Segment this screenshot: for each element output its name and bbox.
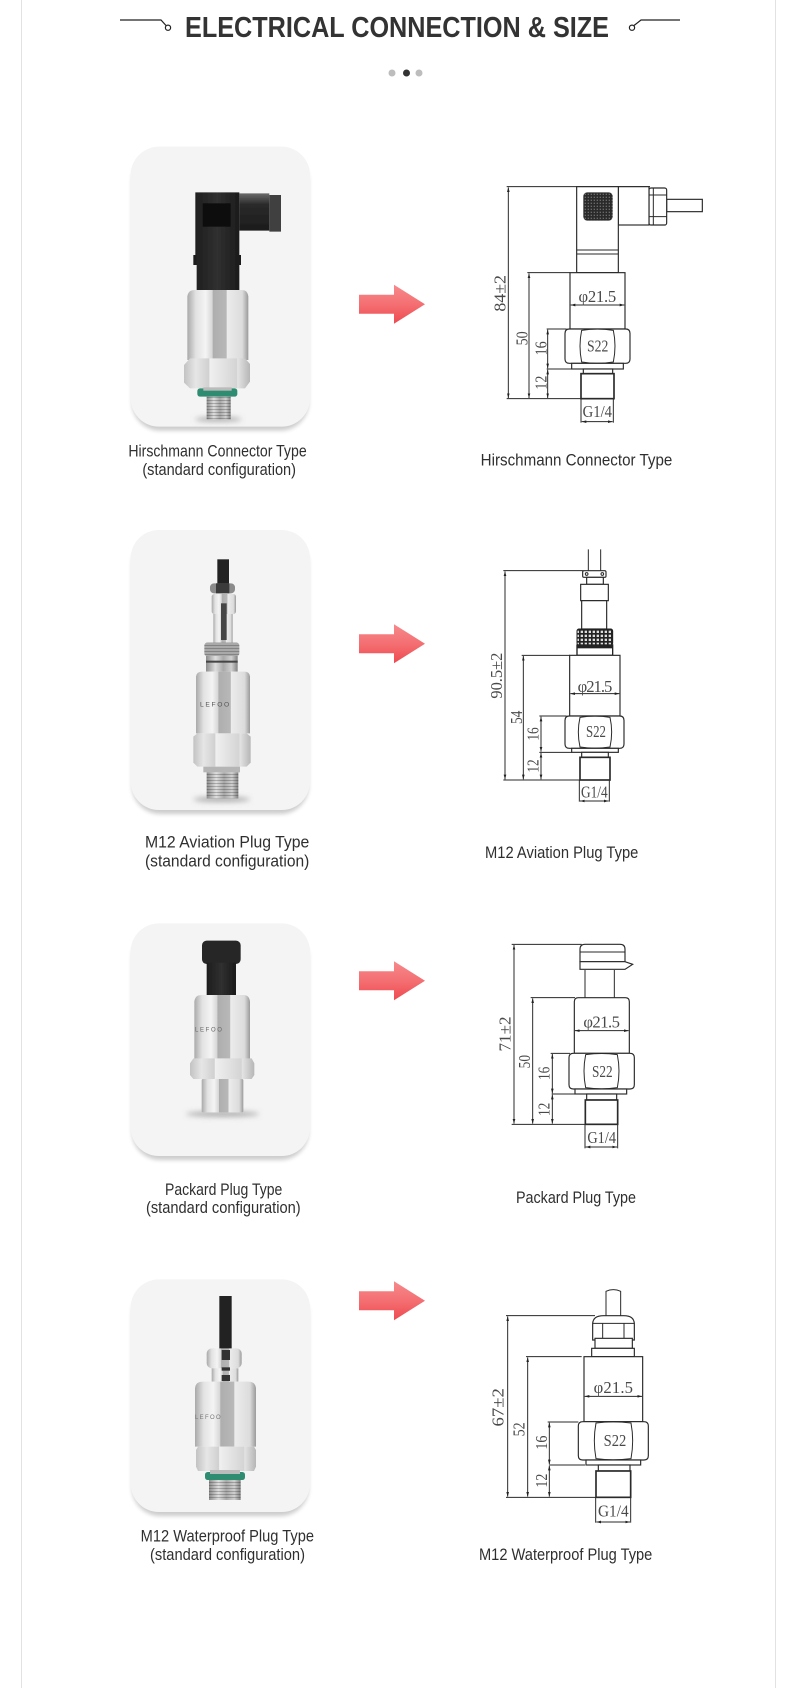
technical drawing: M12 waterproof: S22 <box>604 1431 626 1450</box>
technical drawing: M12 aviation <box>487 549 624 802</box>
panel: M12 waterproof plug type <box>131 1279 652 1564</box>
caption: M12 aviation drawing: M12 Aviation Plug Type <box>485 843 638 862</box>
caption: M12 aviation product <box>145 832 309 870</box>
technical drawing: M12 aviation: S22 <box>586 722 606 741</box>
arrow <box>359 1281 425 1320</box>
title ornament right <box>629 20 680 30</box>
technical drawing: M12 aviation: G1/4 <box>581 783 608 802</box>
technical drawing: Hirschmann: 84±2 <box>490 275 509 312</box>
technical drawing: M12 waterproof: 52 <box>510 1422 529 1436</box>
caption: Hirschmann product: Hirschmann Connector Type <box>128 442 307 461</box>
caption: Packard drawing: Packard Plug Type <box>516 1188 636 1207</box>
technical drawing: Hirschmann: 16 <box>531 341 550 355</box>
technical drawing: M12 aviation: 12 <box>524 759 543 773</box>
technical drawing: Packard: φ21.5 <box>583 1013 620 1032</box>
technical drawing: M12 waterproof: 16 <box>532 1436 551 1450</box>
title ornament left <box>120 20 171 30</box>
technical drawing: Packard: 12 <box>534 1103 553 1116</box>
pagination dots <box>388 70 422 76</box>
technical drawing: M12 waterproof <box>489 1290 648 1523</box>
product card: M12 aviation <box>131 530 310 814</box>
caption: M12 aviation product: (standard configuration) <box>145 851 309 870</box>
product card: M12 waterproof: LEFOO <box>195 1415 222 1421</box>
technical drawing: M12 aviation: 16 <box>524 727 543 741</box>
caption: M12 waterproof product: (standard configuration) <box>150 1545 305 1564</box>
product card: M12 waterproof <box>131 1279 310 1516</box>
caption: Packard product <box>146 1180 301 1217</box>
technical drawing: M12 waterproof: 12 <box>532 1474 551 1488</box>
technical drawing: M12 aviation: φ21.5 <box>578 677 612 696</box>
technical drawing: M12 waterproof: 67±2 <box>489 1388 508 1426</box>
technical drawing: Packard <box>495 944 634 1148</box>
caption: Hirschmann product <box>128 442 307 479</box>
technical drawing: M12 aviation: 54 <box>507 710 526 724</box>
technical drawing: Packard: G1/4 <box>587 1128 617 1147</box>
caption: M12 waterproof product <box>141 1527 314 1564</box>
heading text: ELECTRICAL CONNECTION & SIZE <box>185 12 609 44</box>
caption: M12 waterproof product: M12 Waterproof Plug Type <box>141 1527 314 1546</box>
product card: Packard <box>131 923 310 1160</box>
panel: M12 aviation plug type <box>131 530 638 870</box>
caption: Hirschmann drawing: Hirschmann Connector Type <box>481 451 672 470</box>
caption: M12 waterproof drawing: M12 Waterproof Plug Type <box>479 1545 652 1564</box>
product card: Packard: LEFOO <box>195 1028 224 1034</box>
panel: Packard plug type <box>131 923 636 1217</box>
technical drawing: Hirschmann <box>490 187 702 423</box>
product card: Hirschmann <box>131 147 310 431</box>
technical drawing: Hirschmann: 12 <box>531 376 550 390</box>
technical drawing: Hirschmann: 50 <box>512 331 531 345</box>
technical drawing: Packard: 16 <box>534 1067 553 1080</box>
technical drawing: Hirschmann: S22 <box>587 336 608 355</box>
technical drawing: M12 waterproof: φ21.5 <box>594 1378 633 1397</box>
technical drawing: Packard: 50 <box>515 1055 534 1068</box>
technical drawing: Hirschmann: φ21.5 <box>578 287 616 306</box>
arrow <box>359 285 425 324</box>
technical drawing: Packard: S22 <box>592 1062 613 1081</box>
caption: Packard product: Packard Plug Type <box>165 1180 282 1199</box>
technical drawing: M12 waterproof: G1/4 <box>598 1501 629 1520</box>
title <box>120 12 680 44</box>
arrow <box>359 961 425 1000</box>
caption: M12 aviation product: M12 Aviation Plug Type <box>145 832 309 851</box>
technical drawing: Packard: 71±2 <box>495 1016 514 1051</box>
panel: Hirschmann connector type <box>128 147 702 479</box>
caption: Hirschmann product: (standard configuration) <box>142 460 296 479</box>
technical drawing: M12 aviation: 90.5±2 <box>487 653 506 699</box>
product card: M12 aviation: LEFOO <box>200 702 231 709</box>
technical drawing: Hirschmann: G1/4 <box>583 402 613 421</box>
arrow <box>359 624 425 663</box>
caption: Packard product: (standard configuration) <box>146 1198 301 1217</box>
